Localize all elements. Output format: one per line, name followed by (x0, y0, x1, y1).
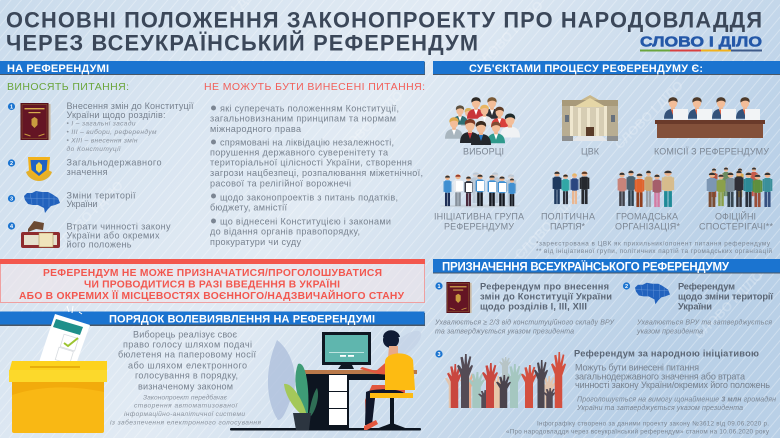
item 4: law: його положень (66, 240, 132, 250)
list: prohibited questions: порушення державного суверенітету та (210, 147, 389, 157)
item 3: people's initiative: Можуть бути винесені питання (575, 362, 699, 372)
title (6, 8, 762, 56)
item 1: constitution: • XIII – внесення змін (66, 136, 138, 144)
item 2: territory referendum: Референдум (678, 282, 735, 292)
label: офіційні спостерігачі (699, 210, 773, 232)
heading bar: на референдумі (0, 61, 425, 75)
heading bar: порядок волевиявлення (0, 312, 425, 326)
text block: voter: створення автоматизованої (134, 402, 239, 410)
label: ініціативна група (434, 212, 524, 232)
item 2: state importance: значення (66, 167, 108, 177)
item 3: territory: 3 (10, 196, 13, 202)
heading bar: порядок волевиявлення: ПОРЯДОК ВОЛЕВИЯВЛЕННЯ НА РЕФЕРЕНДУМІ (109, 313, 375, 325)
icon: ЦВК building (562, 95, 618, 141)
text block: voter: або шляхом електронного (128, 360, 247, 370)
panel: red warning: АБО В ОКРЕМИХ ЇЇ МІСЦЕВОСТЯХ ВОЄННОГО/НАДЗВИЧАЙНОГО СТАНУ (19, 289, 405, 302)
item 1: constitutional referendum: 1 (437, 284, 441, 290)
list: prohibited questions: щодо законопроектів з питань податків, (220, 192, 398, 202)
text block: voter: Законопроект передбачає (143, 394, 228, 402)
label: виборці: ВИБОРЦІ (463, 146, 504, 156)
item 2: territory referendum: указом президента (636, 328, 703, 336)
label: ініціативна група: РЕФЕРЕНДУМУ (444, 222, 514, 232)
item 3: people's initiative: загальнодержавного значення або втрата (575, 372, 746, 382)
item 4: law: України або окремих (66, 230, 160, 240)
item 1: constitutional referendum: Ухвалюється ≥ 2/3 від конституційного складу ВРУ (434, 318, 616, 326)
illustration: person at computer (230, 326, 425, 430)
item 1: constitutional referendum (434, 282, 616, 336)
item 1: constitutional referendum: щодо розділів I, III, XIII (480, 302, 587, 312)
label: ЦВК: ЦВК (581, 146, 600, 156)
footnotes: *зареєстрована в ЦВК як прихильник/опонент питання референдуму (536, 240, 771, 248)
item 1: constitution: 1 (10, 104, 13, 110)
panel: призначення референдуму (433, 259, 780, 436)
heading bar: суб'єкти: СУБ'ЄКТАМИ ПРОЦЕСУ РЕФЕРЕНДУМУ Є: (469, 63, 703, 75)
list: prohibited questions: до відання органів правопорядку, (210, 226, 360, 236)
item 1: constitutional referendum: змін до Конституції України (480, 292, 612, 302)
icon: initiative group (440, 172, 520, 208)
watermarks: СЛОВО І ДІЛО (332, 88, 406, 162)
panel: суб'єкти процесу (433, 61, 780, 255)
list: prohibited questions: спрямовані на ліквідацію незалежності, (220, 137, 394, 147)
footnotes: ** від ініціативної групи, політичних партій та громадських організацій (536, 247, 772, 255)
item 1: constitutional referendum: Референдум про внесення (480, 282, 609, 292)
item 2: state importance: Загальнодержавного (66, 158, 162, 168)
label: громадська організація (615, 212, 680, 232)
list: prohibited questions: які суперечать положенням Конституції, (220, 103, 399, 113)
heading: виносять питання: ВИНОСЯТЬ ПИТАННЯ: (7, 81, 129, 93)
footer source note: «Про народовладдя через всеукраїнський референдум» станом на 10.06.2020 року (506, 428, 770, 436)
list: prohibited questions: загрози нацбезпеці, розпалювання міжетнічної, (210, 168, 423, 178)
label: офіційні спостерігачі: СПОСТЕРІГАЧІ** (699, 222, 773, 232)
label: громадська організація: ОРГАНІЗАЦІЯ* (615, 222, 680, 232)
list: prohibited questions: бюджету, амністії (210, 202, 287, 212)
item 1: constitution: • III – вибори, референдум (66, 128, 157, 136)
list: prohibited questions: територіальної цілісності України, створення (210, 157, 412, 167)
list: prohibited questions: прокуратури чи суду (210, 237, 301, 247)
item 2: territory referendum: України (678, 302, 712, 312)
footer source note: Інфографіку створено за даними проекту закону №3612 від 09.06.2020 р. (537, 420, 769, 428)
panel: на референдумі (0, 61, 425, 250)
item 2: territory referendum (623, 282, 773, 336)
heading: не можуть бути винесені питання: НЕ МОЖУТЬ БУТИ ВИНЕСЕНІ ПИТАННЯ: (204, 81, 425, 93)
footnotes (536, 240, 772, 255)
icon: raised hands (445, 352, 566, 408)
icon: plant (284, 364, 318, 430)
label: політична партія (541, 212, 595, 232)
panel: порядок волевиявлення (0, 306, 425, 433)
label: політична партія: ПАРТІЯ* (550, 222, 585, 232)
heading bar: призначення (433, 259, 780, 274)
item 2: territory referendum: Ухвалюється ВРУ та затверджується (636, 318, 772, 326)
list: prohibited questions: расової та релігійної ворожнечі (210, 178, 351, 188)
item 1: constitution: до Конституції (66, 145, 122, 153)
label: громадська організація: ГРОМАДСЬКА (616, 212, 678, 222)
label: політична партія: ПОЛІТИЧНА (541, 212, 595, 222)
icon: official observers (707, 167, 772, 207)
label: ініціативна група: ІНІЦІАТИВНА ГРУПА (434, 212, 524, 222)
title: ЧЕРЕЗ ВСЕУКРАЇНСЬКИЙ РЕФЕРЕНДУМ (6, 30, 478, 56)
text block: voter: бюлетеня на паперовому носії (118, 349, 256, 359)
item 3: territory: України (66, 199, 98, 209)
title: ОСНОВНІ ПОЛОЖЕННЯ ЗАКОНОПРОЕКТУ ПРО НАРОДОВЛАДДЯ (6, 8, 762, 32)
watermarks: СЛОВО І ДІЛО (512, 188, 586, 262)
watermarks (52, 0, 766, 342)
label: офіційні спостерігачі: ОФІЦІЙНІ (715, 210, 756, 222)
watermarks: СЛОВО І ДІЛО (692, 268, 766, 342)
item 3: people's initiative (435, 348, 776, 412)
panel: red warning (0, 259, 425, 302)
text block: voter: Виборець реалізує своє (133, 329, 237, 339)
item 4: law: 4 (10, 224, 14, 230)
panel: red warning: РЕФЕРЕНДУМ НЕ МОЖЕ ПРИЗНАЧАТИСЯ/ПРОГОЛОШУВАТИСЯ (43, 268, 382, 279)
text block: voter (110, 329, 261, 426)
heading bar: суб'єкти (433, 61, 780, 75)
icon: ballot box (9, 306, 107, 433)
item 3: territory: Зміни території (66, 190, 136, 200)
item 1: constitution: Внесення змін до Конституції (66, 101, 194, 111)
panel: red warning: ЧИ ПРОВОДИТИСЯ В РАЗІ ВВЕДЕННЯ В УКРАЇНІ (84, 278, 340, 290)
item 1: constitutional referendum: та затверджується указом президента (435, 328, 574, 336)
item 3: people's initiative: 3 (437, 352, 441, 358)
item 3: people's initiative: чинності закону України/окремих його положень (575, 380, 770, 390)
icon: commissions (655, 97, 765, 138)
text block: voter: право голосу шляхом подачі (123, 339, 252, 349)
item 4: law (8, 221, 171, 250)
heading bar: на референдумі: НА РЕФЕРЕНДУМІ (7, 63, 109, 75)
text block: voter: визначеному законом (138, 381, 233, 391)
item 1: constitution: України щодо розділів: (66, 110, 166, 120)
icon: civic organization (618, 170, 674, 207)
text block: voter: із забезпечення електронного голосування (110, 418, 261, 426)
item 4: law: Втрати чинності закону (66, 222, 171, 232)
text block: voter: інформаційно-аналітичної системи (124, 410, 245, 418)
item 3: people's initiative: України та затверджується указом президента (576, 404, 743, 412)
item 1: constitution: • I – загальні засади (66, 120, 136, 128)
list: prohibited questions: що віднесені Конституцією і законами (220, 216, 391, 226)
item 2: territory referendum: щодо зміни території (678, 292, 773, 302)
item 3: people's initiative: Референдум за народною ініціативою (574, 348, 759, 358)
label: комісії: КОМІСІЇ З РЕФЕРЕНДУМУ (654, 146, 769, 156)
watermarks: СЛОВО І ДІЛО (612, 78, 686, 152)
list: prohibited questions: міжнародного права (210, 124, 302, 134)
item 2: territory referendum: 2 (625, 284, 628, 290)
item 3: people's initiative: Проголошується на вимогу щонайменше 3 млн громадян (577, 396, 776, 404)
icon: voters (445, 97, 520, 145)
list: prohibited questions (210, 103, 423, 247)
text block: voter: голосування в порядку, (135, 370, 238, 380)
heading bar: призначення: ПРИЗНАЧЕННЯ ВСЕУКРАЇНСЬКОГО РЕФЕРЕНДУМУ (442, 260, 730, 274)
item 3: territory (8, 190, 136, 213)
icon: political party (553, 171, 589, 204)
logo: Слово і діло: СЛОВО І ДІЛО (640, 34, 762, 50)
item 2: state importance: 2 (10, 161, 13, 167)
watermarks: СЛОВО І ДІЛО (52, 178, 126, 252)
item 2: state importance (8, 157, 162, 181)
list: prohibited questions: загальновизнаним принципам та нормам (210, 113, 396, 123)
item 1: constitution (8, 101, 194, 153)
footer source note (506, 420, 770, 436)
